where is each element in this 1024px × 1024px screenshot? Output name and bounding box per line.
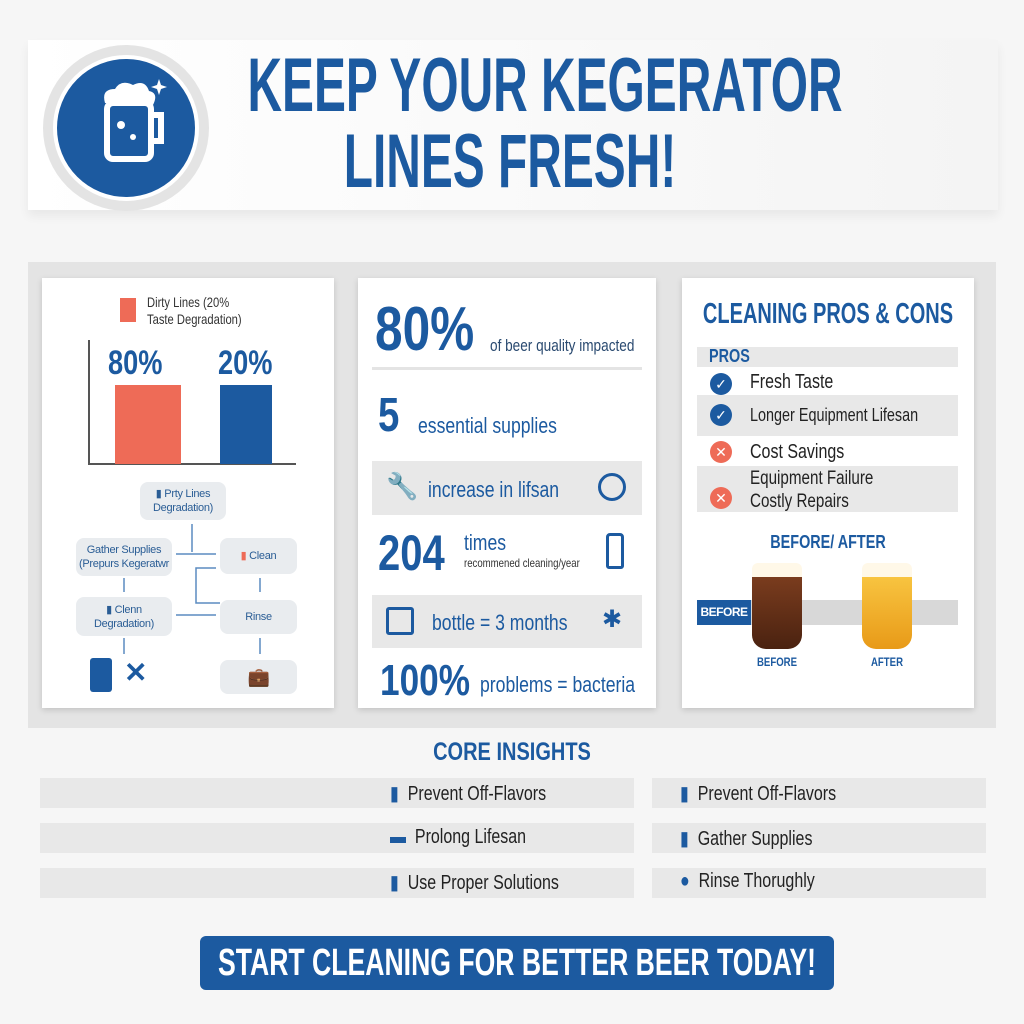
flowchart: Clean [249,550,276,562]
flowchart: Degradation) [153,502,213,514]
flowchart: ▮ Prty Lines [156,488,210,500]
panel: pros cons: ✕ [715,490,727,506]
core insights rows [40,778,986,898]
panel: pros cons: ✓ [715,407,727,423]
flowchart: ▮ [241,550,246,562]
panel: pros cons: BEFORE/ AFTER [770,532,886,552]
bar chart [88,340,296,465]
panel: key stats: problems = bacteria [480,672,635,697]
panel: pros cons: ✕ [715,444,727,460]
panel: key stats: essential supplies [418,413,557,438]
panel: key stats: times [464,530,506,555]
panel: pros cons: PROS [709,346,750,366]
stat row: lifespan: 🔧 [386,471,418,501]
flowchart: 💼 [247,667,270,687]
panel: pros cons: Cost Savings [750,441,844,463]
panel: pros cons: Equipment Failure [750,468,873,489]
call to action button: START CLEANING FOR BETTER BEER TODAY! [218,942,816,984]
core insights rows: ▮ Use Proper Solutions [390,872,559,894]
header banner [28,40,998,210]
bar chart: 20% [218,344,272,382]
panel: key stats: 5 [378,389,399,442]
core insights rows: ▮ Gather Supplies [680,828,812,850]
panel: pros cons: Costly Repairs [750,491,849,512]
icon: beer logo [43,45,209,211]
flowchart: ✕ [124,657,147,688]
panel: pros cons: AFTER [871,655,903,669]
panel: key stats [358,278,656,708]
flowchart: Rinse [245,611,272,623]
panel: key stats: of beer quality impacted [490,336,634,355]
icon: dark beer [752,563,802,649]
title: KEEP YOUR KEGERATOR [247,43,843,128]
title [247,43,843,204]
flowchart [76,482,297,694]
panel: key stats: recommened cleaning/year [464,556,580,570]
stat row: bottle [372,595,642,648]
panel: chart and flow: Dirty Lines (20% [147,294,229,310]
panel: pros cons [682,278,974,708]
main grey panel [28,262,996,728]
core insights rows: ▮ Prevent Off-Flavors [680,783,836,805]
panel: chart and flow: Taste Degradation) [147,311,242,327]
stat row: lifespan: increase in lifsan [428,477,559,502]
bar chart: 80% [108,344,162,382]
core insights rows: ● Rinse Thorughly [680,870,815,892]
legend [120,298,136,322]
icon: light beer [862,563,912,649]
flowchart: Gather Supplies [87,544,161,556]
stat row: bottle: bottle = 3 months [432,610,568,635]
core insights rows: ▬ Prolong Lifesan [390,826,526,848]
flowchart: (Prepurs Kegeratwr [79,558,169,570]
stat row: bottle: ✱ [602,606,622,633]
title: LINES FRESH! [344,119,676,204]
panel: key stats: 100% [380,656,470,705]
flowchart: ▮ Clenn [106,604,142,616]
panel: pros cons: Longer Equipment Lifesan [750,405,918,425]
stat row: lifespan [372,461,642,515]
flowchart: Degradation) [94,618,154,630]
panel: pros cons: Fresh Taste [750,371,833,393]
panel: chart and flow [42,278,334,708]
core insights heading: CORE INSIGHTS [433,738,591,766]
panel: pros cons: ✓ [715,376,727,392]
panel: key stats: 204 [378,525,445,581]
panel: pros cons: CLEANING PROS & CONS [703,298,953,330]
panel: pros cons: BEFORE [757,655,797,669]
panel: pros cons: BEFORE [700,605,748,619]
core insights rows: ▮ Prevent Off-Flavors [390,783,546,805]
panel: key stats: 80% [375,295,474,364]
